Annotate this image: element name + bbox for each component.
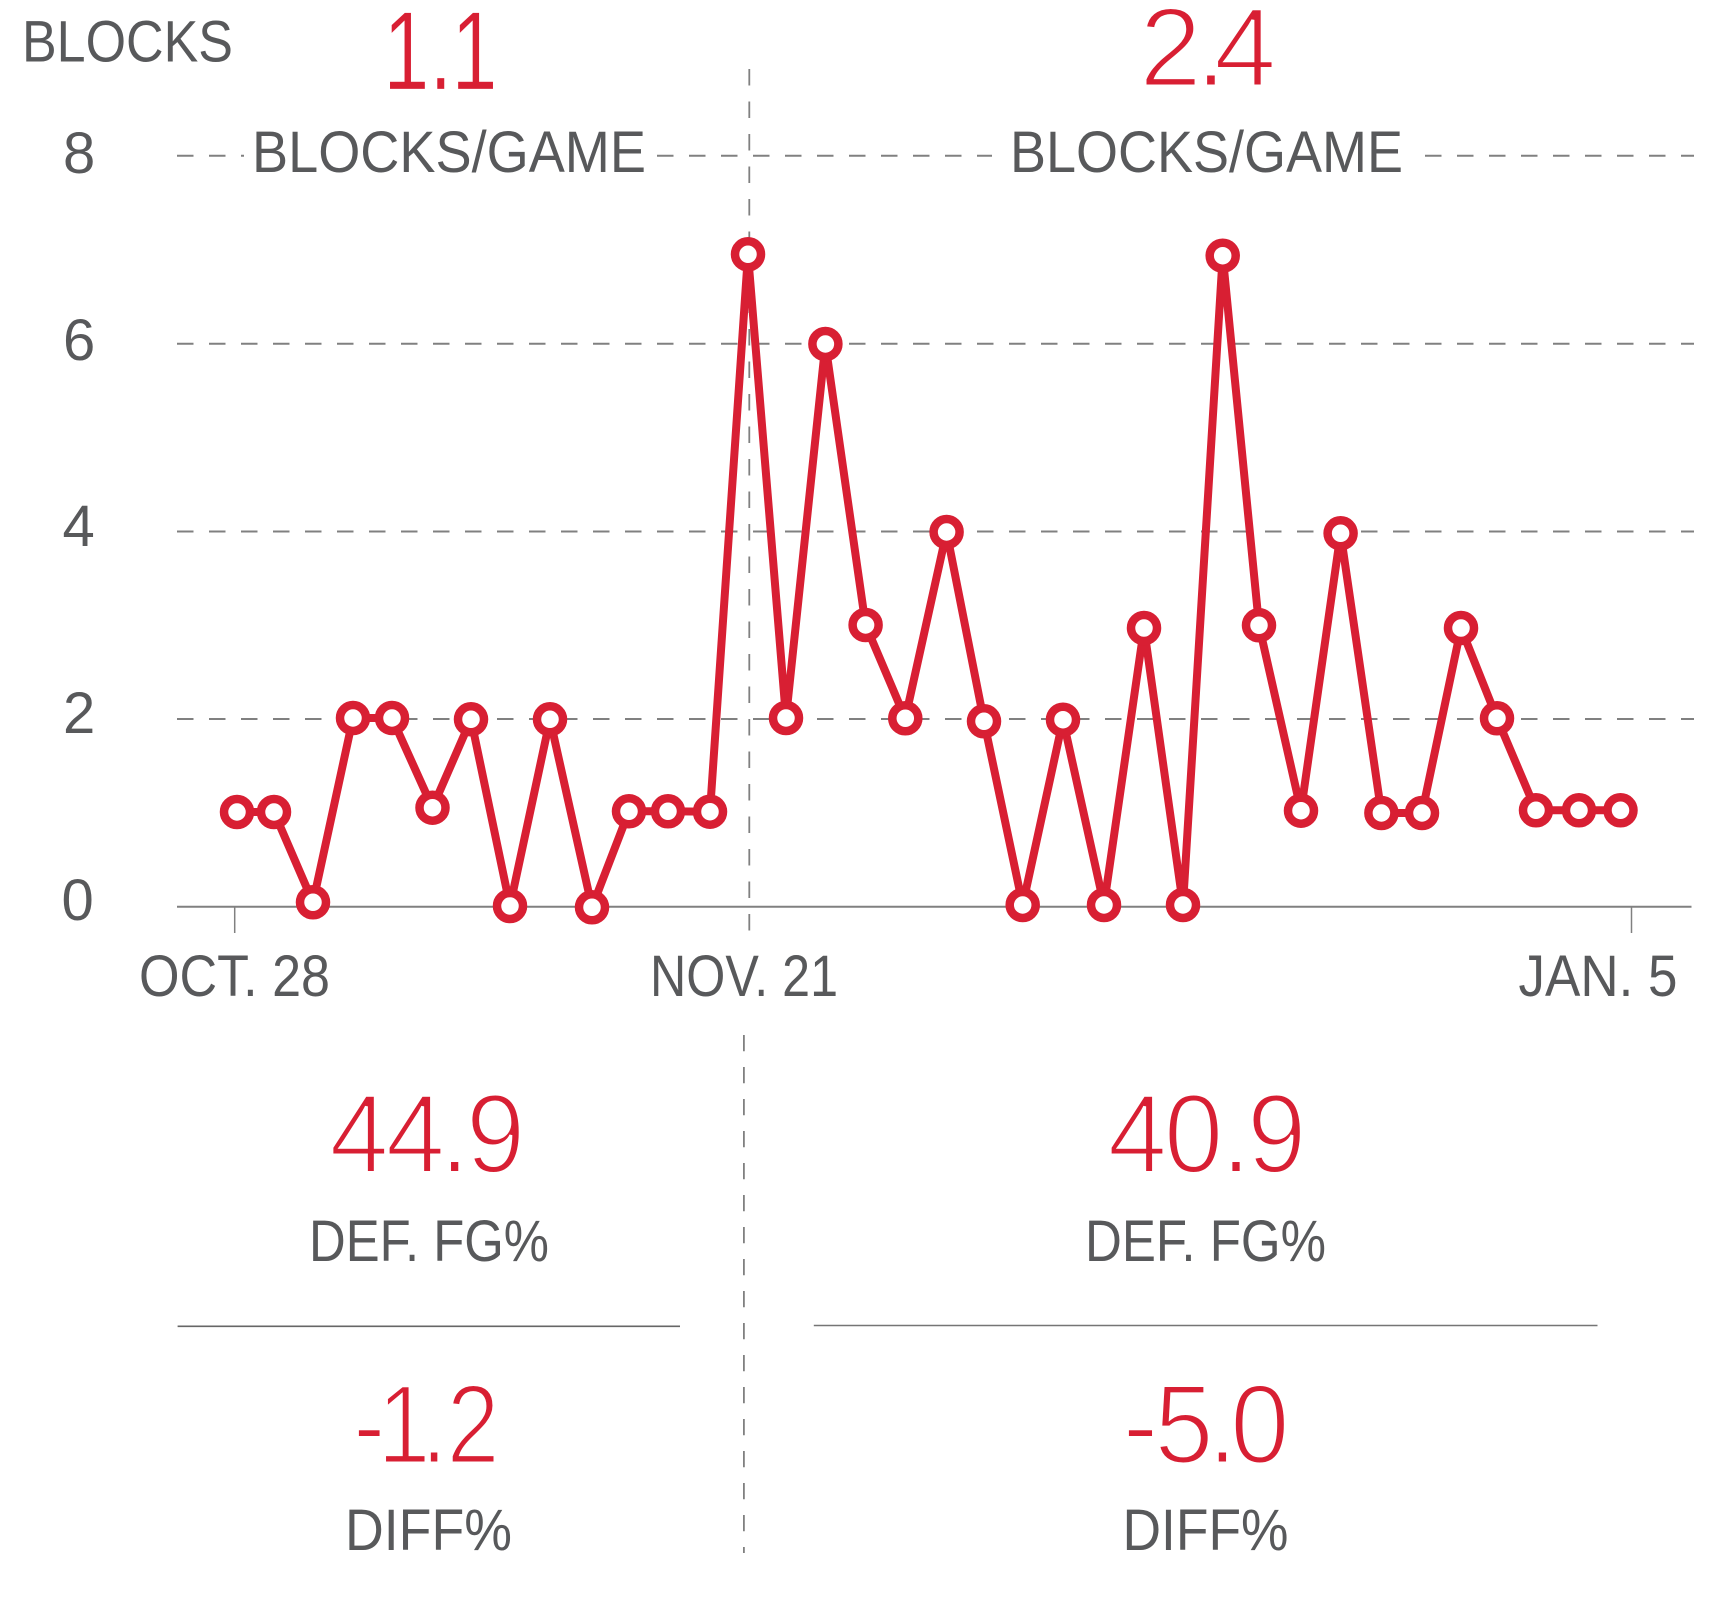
y-axis labels: 4 bbox=[62, 494, 95, 559]
y-axis labels: 0 bbox=[62, 868, 94, 933]
data point markers bbox=[224, 241, 1634, 920]
x-axis date labels: OCT. 28 bbox=[139, 944, 330, 1009]
stat: diff% before bbox=[345, 1363, 512, 1563]
chart: blocks per game line chart bbox=[62, 69, 1694, 1009]
stat: diff% before: DIFF% bbox=[345, 1498, 512, 1563]
rule bbox=[814, 1324, 1598, 1326]
lower divider bbox=[743, 1035, 745, 1553]
stat: defensive FG% after bbox=[1085, 1072, 1326, 1274]
y-axis labels bbox=[62, 121, 95, 933]
x-axis date labels bbox=[139, 944, 1678, 1009]
stat: defensive FG% after: 40.9 bbox=[1108, 1072, 1306, 1197]
stat: diff% after: DIFF% bbox=[1122, 1498, 1288, 1563]
y-axis labels: 6 bbox=[63, 308, 95, 373]
y-axis labels: 8 bbox=[63, 121, 95, 186]
callout: before Nov. 21 blocks per game: BLOCKS/GAME bbox=[252, 120, 646, 185]
x-axis baseline and ticks bbox=[177, 907, 1692, 933]
y-axis gridlines bbox=[177, 156, 1694, 719]
callout: after Nov. 21 blocks per game: BLOCKS/GAME bbox=[1010, 120, 1403, 185]
stats: after Nov. 21 bbox=[814, 1072, 1598, 1563]
stats: before Nov. 21 bbox=[178, 1072, 680, 1563]
y-axis title: BLOCKS bbox=[22, 10, 233, 74]
rule bbox=[178, 1325, 680, 1327]
y-axis labels: 2 bbox=[63, 681, 95, 746]
x-axis date labels: NOV. 21 bbox=[650, 944, 838, 1009]
data line bbox=[237, 254, 1620, 907]
stat: defensive FG% after: DEF. FG% bbox=[1085, 1209, 1326, 1274]
stat: defensive FG% before: 44.9 bbox=[330, 1072, 525, 1197]
x-axis date labels: JAN. 5 bbox=[1518, 944, 1678, 1009]
stat: diff% after bbox=[1122, 1363, 1289, 1563]
callout: before Nov. 21 blocks per game bbox=[244, 0, 656, 185]
stat: defensive FG% before bbox=[309, 1072, 549, 1274]
stat: diff% before: -1.2 bbox=[353, 1363, 500, 1488]
callout: after Nov. 21 blocks per game bbox=[992, 0, 1423, 185]
stat: defensive FG% before: DEF. FG% bbox=[309, 1209, 549, 1274]
vertical divider at Nov. 21 bbox=[748, 69, 750, 933]
stat: diff% after: -5.0 bbox=[1123, 1363, 1289, 1488]
